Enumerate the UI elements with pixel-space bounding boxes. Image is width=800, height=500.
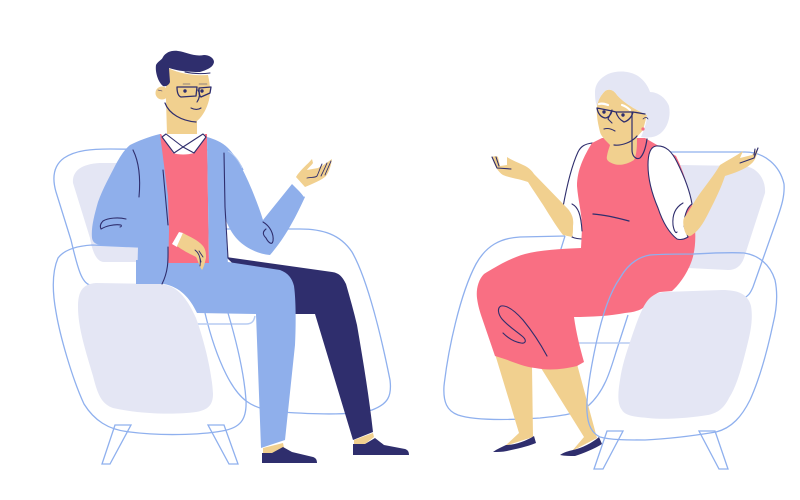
right shoe xyxy=(560,437,602,456)
left chair leg xyxy=(594,431,623,469)
glasses chain xyxy=(632,113,647,159)
right leg xyxy=(541,364,597,451)
eyebrows xyxy=(183,83,207,85)
left arm and hand xyxy=(492,156,573,237)
nose xyxy=(608,110,612,123)
back line xyxy=(560,236,565,252)
lap hand lines xyxy=(195,250,203,266)
sweater xyxy=(160,134,209,263)
eyebrows xyxy=(599,104,630,110)
right armrest outline xyxy=(205,229,390,414)
elbow crease right xyxy=(263,222,273,243)
right eye xyxy=(200,89,204,93)
back cushion xyxy=(73,163,150,262)
back ankle xyxy=(354,433,374,444)
back cushion xyxy=(680,165,765,270)
chair outline xyxy=(587,253,777,440)
eyes and earring xyxy=(602,110,645,131)
ear detail xyxy=(158,90,162,91)
lap hand cuff xyxy=(172,232,183,247)
left shoe xyxy=(493,436,536,452)
collar flaps xyxy=(162,134,206,153)
raised hand lines xyxy=(307,161,331,178)
seat line xyxy=(578,342,630,344)
hair strand xyxy=(185,72,210,74)
shoulder line xyxy=(133,150,140,197)
right sleeve cuff xyxy=(673,203,683,233)
mouth xyxy=(604,128,615,131)
jacket right side and arm xyxy=(207,137,305,264)
skirt fold xyxy=(498,306,547,356)
raised hand xyxy=(296,159,332,187)
left eye xyxy=(602,110,606,114)
left sleeve xyxy=(563,143,592,239)
right hand lines xyxy=(740,148,758,163)
inner arm line xyxy=(53,245,246,435)
hair xyxy=(156,51,214,86)
earring xyxy=(641,127,645,131)
man xyxy=(92,51,409,463)
glasses xyxy=(597,108,645,122)
jacket left side and arm xyxy=(92,134,169,284)
chair back outline xyxy=(670,152,784,298)
front ankle xyxy=(263,443,284,453)
smile xyxy=(191,108,201,110)
far leg xyxy=(226,257,373,440)
left leg xyxy=(495,354,533,446)
armchair: woman's side chair behind xyxy=(444,152,784,420)
face details xyxy=(158,72,211,122)
right arm and hand xyxy=(683,148,758,236)
armchair: woman's front chair xyxy=(587,253,777,469)
neck and face xyxy=(597,90,647,165)
trousers near leg xyxy=(136,260,296,448)
left hand lines xyxy=(492,157,511,169)
jaw line xyxy=(614,136,637,145)
hair xyxy=(595,72,670,137)
left eye xyxy=(183,89,187,93)
belly line xyxy=(593,214,629,221)
right sleeve xyxy=(648,146,692,240)
right chair leg xyxy=(208,425,238,464)
back shoe xyxy=(353,438,409,455)
clothing and hand lines xyxy=(100,150,331,284)
right chair leg xyxy=(699,431,728,469)
glasses xyxy=(177,87,211,97)
left chair outline xyxy=(444,236,628,420)
armchair: man's chair xyxy=(53,149,390,464)
left sleeve cuff xyxy=(572,204,582,231)
left chair leg xyxy=(102,425,131,464)
shirt collar xyxy=(161,134,206,154)
shirt bottom xyxy=(161,134,205,154)
ear detail xyxy=(643,118,648,119)
woman xyxy=(477,72,758,456)
jacket edge left xyxy=(162,170,168,284)
lap hand xyxy=(177,233,206,270)
front shoe xyxy=(262,447,317,463)
face details xyxy=(492,108,758,356)
front cushion xyxy=(618,290,752,419)
ear xyxy=(156,86,168,100)
shoulder chair line xyxy=(228,151,242,168)
right eye xyxy=(621,113,625,117)
chair back outline xyxy=(54,149,243,285)
jaw line xyxy=(165,103,196,122)
front cushion xyxy=(78,283,213,414)
elbow crease left xyxy=(100,218,126,229)
seat line xyxy=(197,316,255,324)
jacket edge right xyxy=(224,153,228,258)
dress xyxy=(477,138,695,369)
nose xyxy=(197,90,200,102)
neck and face xyxy=(166,66,210,134)
eyes xyxy=(183,89,204,93)
raised cuff xyxy=(293,181,306,197)
